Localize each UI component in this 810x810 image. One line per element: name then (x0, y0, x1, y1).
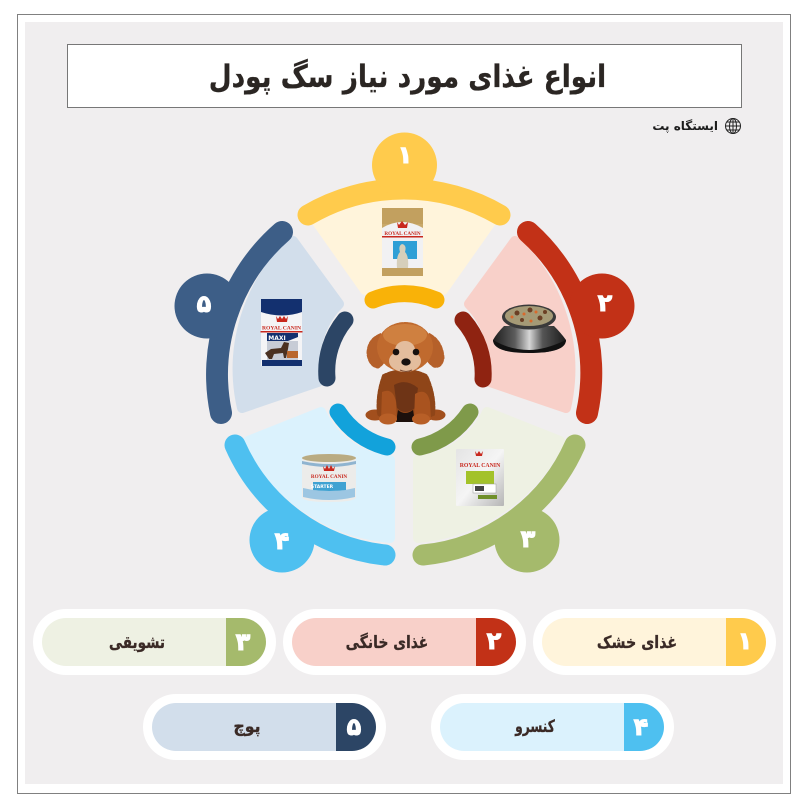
inner arc 2 (463, 320, 483, 379)
legend item 4: ۴ (634, 713, 648, 741)
legend item 1 (533, 609, 776, 675)
title (68, 44, 742, 108)
inner arc 1 (373, 294, 436, 300)
outer arc 1 (308, 189, 500, 215)
legend item 3: تشویقی (109, 633, 165, 652)
wedge 2 (469, 241, 570, 408)
product: wet food pouch: ROYAL CANIN (262, 326, 301, 332)
icon: globe (726, 118, 740, 134)
product: dry food bag (382, 208, 423, 276)
panel: segment 4 canned food (235, 412, 390, 572)
outer arc 3 (423, 445, 575, 555)
number badge 2: ۲ (598, 289, 613, 317)
legend item 1: ۱ (738, 627, 752, 655)
product: treat sachet: ROYAL CANIN (460, 463, 501, 469)
outer arc 4 (235, 445, 385, 555)
legend item 3: ۳ (236, 628, 251, 656)
legend item 5 (143, 694, 386, 760)
number badge 1: ۱ (398, 141, 412, 169)
source label: ایستگاه پت (652, 119, 718, 133)
wedge 1 (317, 200, 491, 290)
title: انواع غذای مورد نیاز سگ پودل (209, 58, 606, 95)
number badge 1 (372, 132, 437, 198)
wedge 3 (418, 412, 560, 538)
wedge 5 (238, 241, 339, 408)
product: dog food can: STARTER (311, 484, 334, 490)
number badge 3 (494, 508, 560, 572)
legend item 4 (431, 694, 674, 760)
panel: segment 1 dry food (308, 132, 500, 300)
puppy ears (368, 335, 443, 367)
panel: segment 3 treats (418, 412, 575, 572)
inner arc 4 (338, 412, 387, 447)
inner arc 5 (327, 320, 345, 378)
legend item 5: پوچ (233, 716, 261, 737)
product: food bowl (493, 304, 566, 353)
panel: segment 5 pouch (174, 232, 345, 413)
panel: segment 2 homemade food (463, 232, 634, 413)
product: treat sachet (456, 449, 504, 506)
number badge 4: ۴ (275, 527, 289, 555)
product: dog food can: ROYAL CANIN (311, 474, 347, 480)
product: dry food bag: ROYAL CANIN (384, 231, 421, 237)
number badge 5 (174, 274, 240, 338)
wedge 4 (248, 412, 390, 538)
product: wet food pouch (260, 299, 302, 366)
product: dog food can (302, 454, 356, 502)
inner arc 3 (420, 412, 470, 447)
puppy body (379, 371, 433, 420)
legend item 5: ۵ (347, 713, 361, 741)
number badge 2 (570, 274, 634, 338)
puppy head (379, 324, 431, 370)
number badge 4 (250, 508, 314, 572)
number badge 5: ۵ (197, 290, 211, 318)
legend item 2: ۲ (487, 627, 502, 655)
legend item 1: غذای خشک (597, 632, 677, 652)
product: wet food pouch: MAXI (268, 335, 286, 342)
puppy rear paws (366, 410, 446, 420)
puppy face (389, 350, 421, 372)
legend item 2: غذای خانگی (346, 632, 428, 652)
outer arc 2 (528, 232, 591, 413)
source label (652, 118, 740, 134)
legend item 3 (33, 609, 276, 675)
legend item 4: کنسرو (514, 717, 555, 737)
legend item 2 (283, 609, 526, 675)
illustration: poodle puppy (366, 324, 446, 424)
outer arc 5 (217, 232, 282, 413)
number badge 3: ۳ (521, 525, 536, 553)
